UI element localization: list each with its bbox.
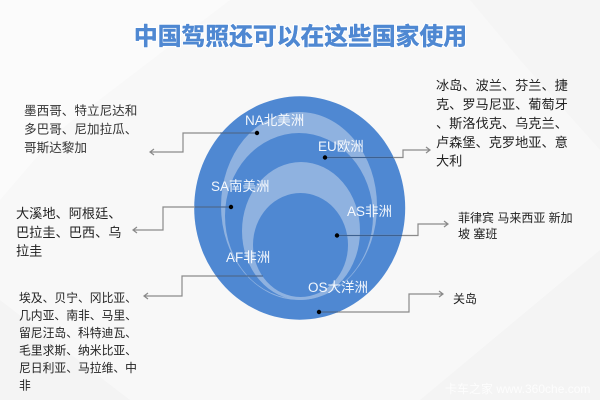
- text: North America countries: [24, 104, 137, 155]
- title: 中国驾照还可以在这些国家使用: [134, 24, 467, 50]
- connector: North America: [150, 131, 259, 155]
- text: Africa countries: 留尼汪岛、科特迪瓦、: [19, 326, 137, 340]
- text: Asia countries: 坡 塞班: [458, 226, 497, 241]
- continent labels: [211, 113, 392, 295]
- text: Europe countries: 卢森堡、克罗地亚、意: [436, 134, 568, 150]
- text: Africa countries: 非: [19, 378, 31, 392]
- text: North America countries: 墨西哥、特立尼达和: [24, 104, 137, 118]
- continent labels: EU欧洲: [318, 139, 364, 154]
- continent labels: AF非洲: [226, 250, 270, 265]
- text: South America countries: 巴拉圭、巴西、乌: [16, 225, 122, 240]
- connector: Asia: [335, 221, 448, 238]
- nested continent circles: [194, 96, 405, 320]
- text: North America countries: 多巴哥、尼加拉瓜、: [24, 122, 137, 136]
- continent labels: OS大洋洲: [308, 280, 368, 295]
- text: North America countries: 哥斯达黎加: [24, 141, 87, 155]
- text: Africa countries: 埃及、贝宁、冈比亚、: [19, 291, 137, 305]
- continent labels: NA北美洲: [245, 113, 304, 128]
- text: Africa countries: [19, 291, 137, 392]
- text: Oceania countries: 关岛: [453, 291, 477, 306]
- text: Europe countries: 克、罗马尼亚、葡萄牙: [436, 97, 568, 112]
- text: Europe countries: 大利: [436, 154, 462, 168]
- connector: Africa: [144, 276, 263, 299]
- continent labels: SA南美洲: [211, 179, 270, 194]
- text: Europe countries: [436, 78, 568, 168]
- connector: Oceania: [317, 291, 443, 314]
- connector: Europe: [323, 147, 430, 160]
- continent labels: AS非洲: [347, 204, 392, 219]
- text: Asia countries: 菲律宾 马来西亚 新加: [458, 210, 573, 225]
- text: Africa countries: 几内亚、南非、马里、: [19, 308, 137, 322]
- text: Africa countries: 尼日利亚、马拉维、中: [19, 361, 137, 375]
- text: South America countries: [16, 206, 122, 258]
- text: Asia countries: [458, 210, 573, 241]
- text: South America countries: 拉圭: [16, 244, 42, 258]
- text: Europe countries: 冰岛、波兰、芬兰、捷: [436, 78, 568, 93]
- watermark: 卡车之家 www.360che.com: [445, 381, 590, 396]
- text: South America countries: 大溪地、阿根廷、: [16, 206, 122, 221]
- title: 中国驾照还可以在这些国家使用: [134, 24, 467, 50]
- text: Europe countries: 、斯洛伐克、乌克兰、: [436, 116, 568, 131]
- connector: South America: [133, 205, 233, 233]
- text: Africa countries: 毛里求斯、纳米比亚、: [19, 344, 137, 358]
